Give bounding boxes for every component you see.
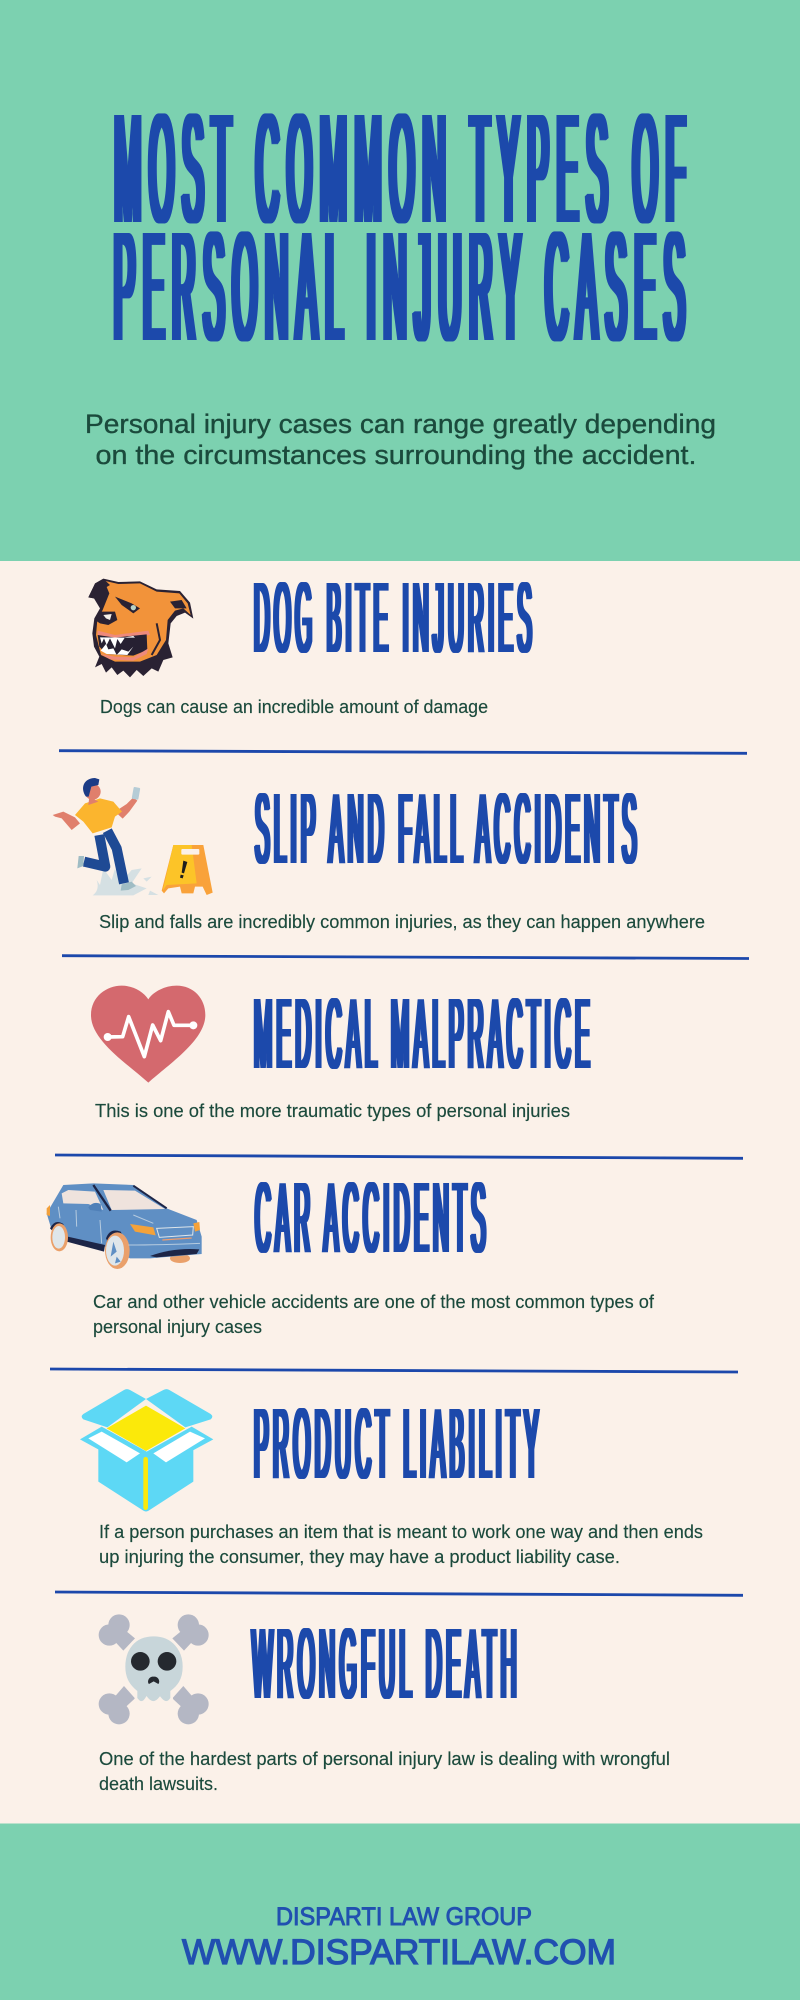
panel: wrongful death <box>99 1608 670 1794</box>
description: This is one of the more traumatic types of personal injuries <box>95 1101 570 1121</box>
description <box>93 1292 655 1337</box>
panel: header <box>0 0 800 561</box>
website: WWW.DISPARTILAW.COM <box>182 1933 616 1972</box>
description: personal injury cases <box>93 1317 262 1337</box>
divider <box>50 1369 738 1372</box>
intro text: Personal injury cases can range greatly depending <box>85 409 716 439</box>
icon: dog head <box>88 579 193 677</box>
description: up injuring the consumer, they may have a product liability case. <box>99 1547 620 1567</box>
description: Dogs can cause an incredible amount of damage <box>100 697 488 717</box>
icon: skull and crossbones <box>99 1614 209 1724</box>
intro text <box>85 409 716 470</box>
description: death lawsuits. <box>99 1774 218 1794</box>
panel: car accidents <box>47 1162 655 1337</box>
description: Slip and falls are incredibly common injuries, as they can happen anywhere <box>99 912 705 932</box>
panel: slip and fall accidents <box>53 773 705 932</box>
divider <box>55 1155 743 1158</box>
icon: car <box>47 1183 202 1269</box>
firm name: DISPARTI LAW GROUP <box>276 1903 532 1931</box>
panel: dog bite injuries <box>88 562 536 717</box>
title <box>114 81 694 373</box>
intro text: on the circumstances surrounding the accident. <box>96 440 696 470</box>
icon: open box <box>80 1389 213 1511</box>
divider <box>55 1592 743 1595</box>
panel: medical malpractice <box>91 978 594 1121</box>
description <box>99 1522 703 1567</box>
description: If a person purchases an item that is meant to work one way and then ends <box>99 1522 703 1542</box>
divider <box>59 751 747 753</box>
panel: footer <box>0 1824 800 2000</box>
icon: slipping man and wet floor sign <box>53 778 213 895</box>
description: Car and other vehicle accidents are one of the most common types of <box>93 1292 655 1312</box>
panel: product liability <box>80 1388 703 1567</box>
icon: heart with pulse <box>91 986 205 1083</box>
divider <box>62 956 749 958</box>
description <box>99 1749 670 1794</box>
description: One of the hardest parts of personal injury law is dealing with wrongful <box>99 1749 670 1769</box>
